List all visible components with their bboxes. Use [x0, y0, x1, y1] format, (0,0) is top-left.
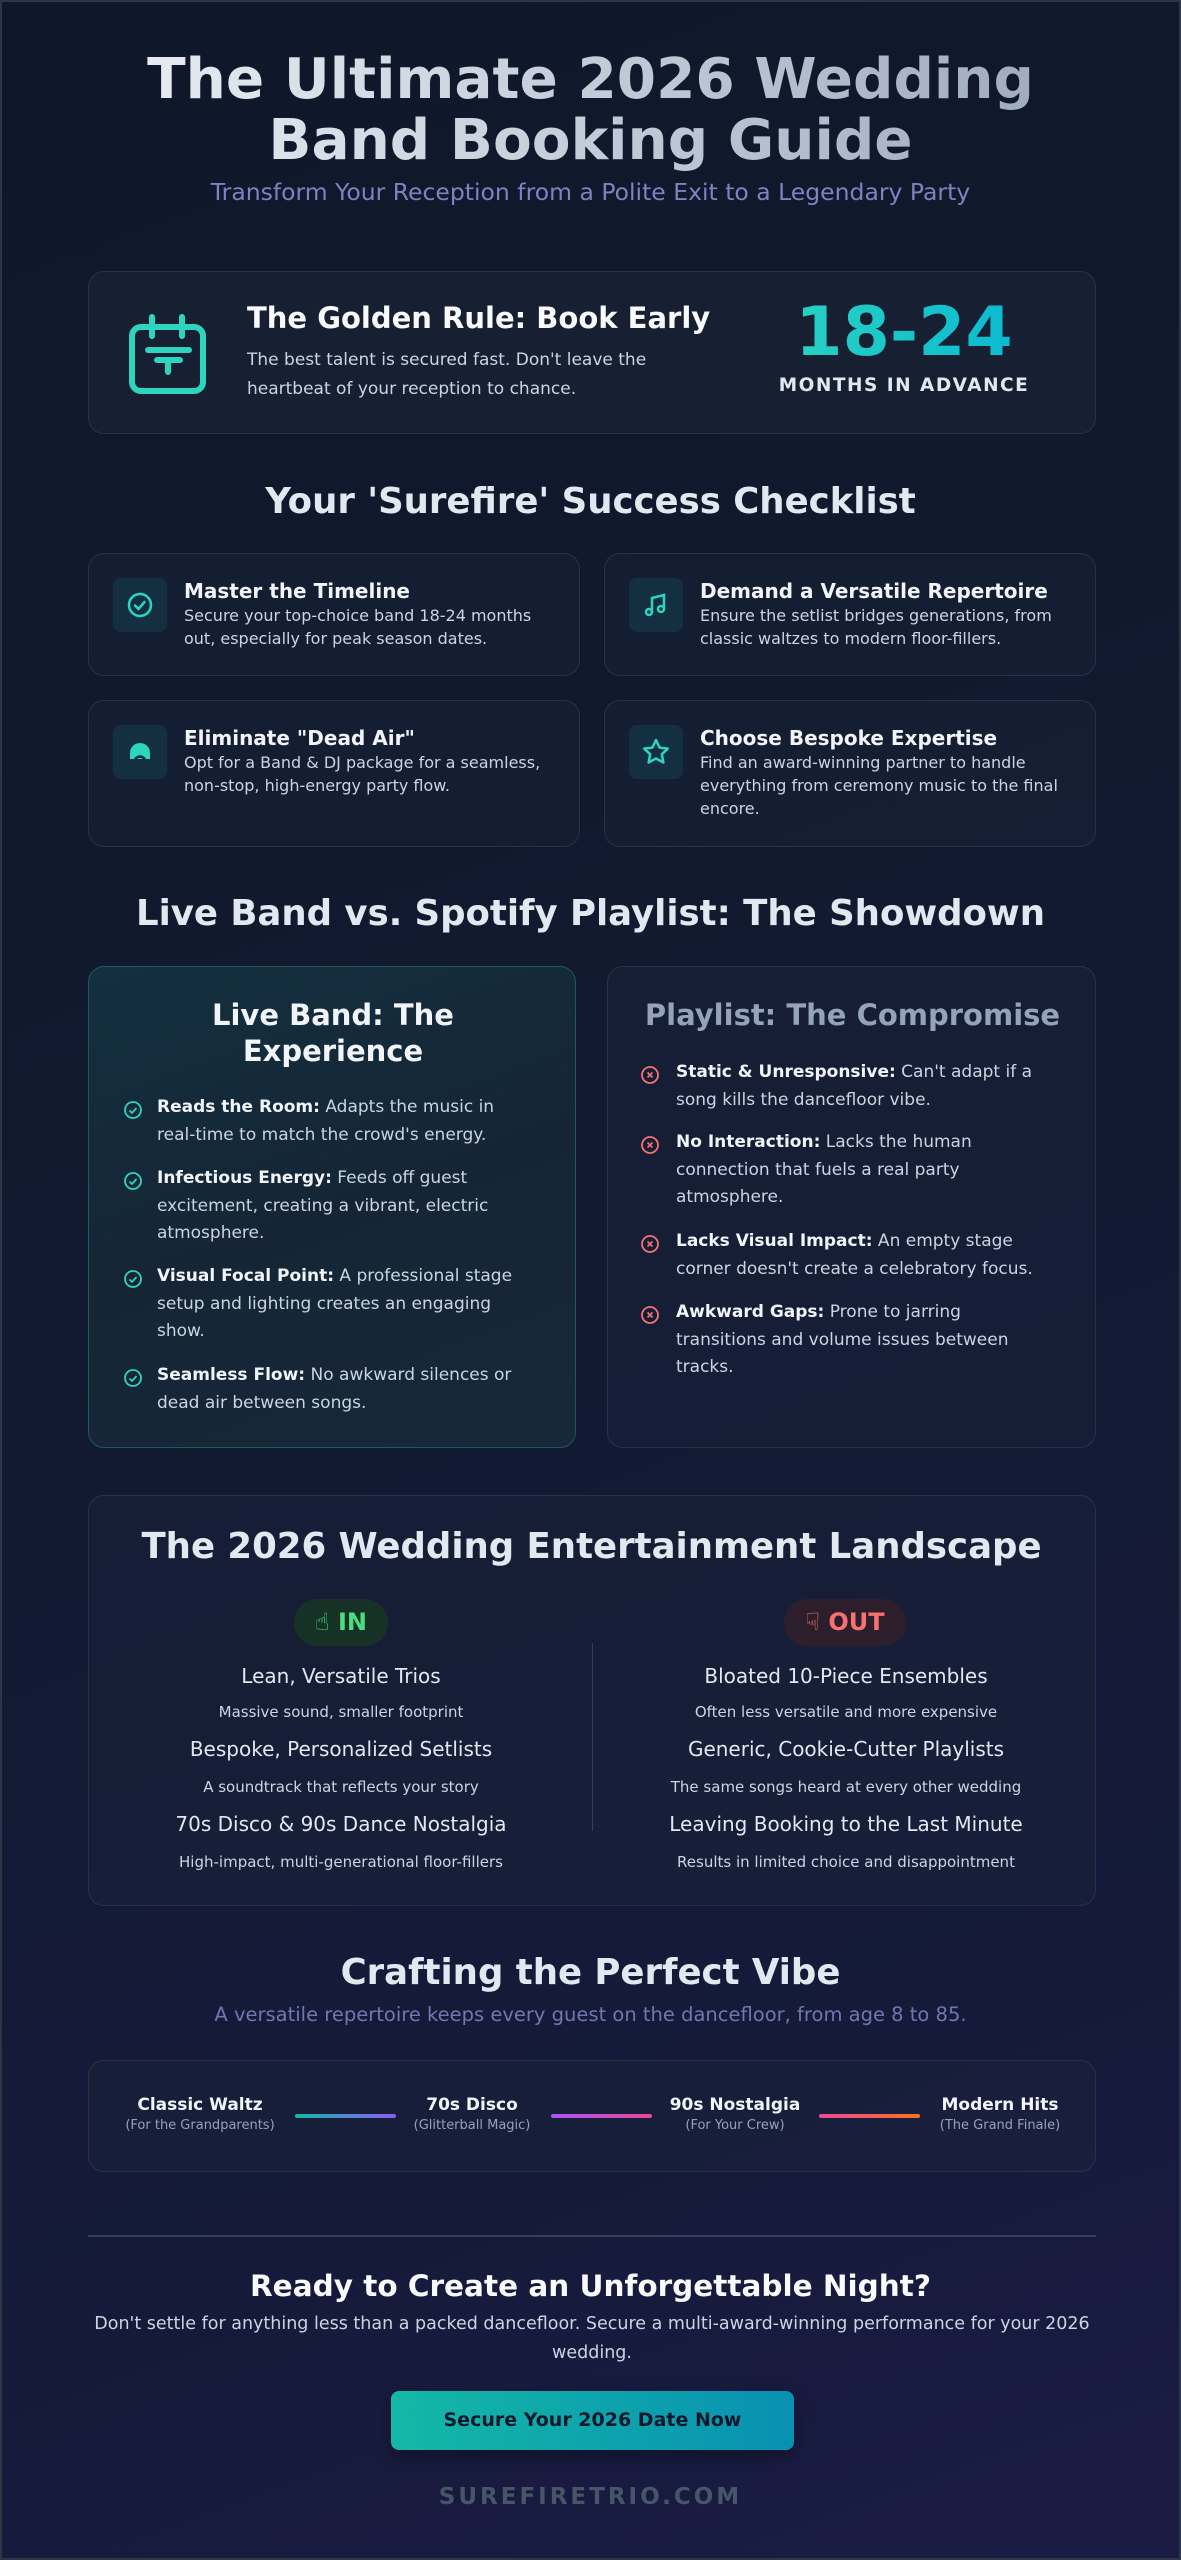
CTA button	[391, 2391, 794, 2450]
CTA heading: Ready to Create an Unforgettable Night?	[250, 2269, 931, 2303]
icon: music note	[629, 578, 683, 632]
panel: checklist timeline: Secure your top-choice band 18-24 months out, especially for peak season dates.	[184, 606, 531, 648]
timeline items: (For Your Crew)	[685, 2118, 785, 2133]
panel: checklist timeline: Master the Timeline	[184, 579, 410, 603]
out list: The same songs heard at every other wedding	[671, 1778, 1021, 1796]
icon: headphones	[113, 725, 167, 779]
live band heading: Live Band: The	[212, 998, 454, 1032]
live band heading: Experience	[243, 1034, 423, 1068]
stat: 18-24 months: 18-24	[795, 293, 1013, 372]
panel: landscape	[88, 1495, 1096, 1906]
panel: checklist expertise	[604, 700, 1096, 847]
pill: OUT: ☟ OUT	[805, 1608, 885, 1636]
heading: checklist: Your 'Surefire' Success Checklist	[265, 481, 916, 522]
playlist list: No Interaction: Lacks the human connection that fuels a real party atmosphere.	[676, 1132, 972, 1207]
icon: check circle	[113, 578, 167, 632]
in list: High-impact, multi-generational floor-fillers	[179, 1853, 503, 1871]
out list: Results in limited choice and disappointment	[677, 1853, 1015, 1871]
timeline items: (For the Grandparents)	[125, 2118, 275, 2133]
in list: Massive sound, smaller footprint	[219, 1703, 463, 1721]
playlist heading: Playlist: The Compromise	[645, 998, 1060, 1032]
stat: 18-24 months	[779, 293, 1029, 396]
icon: calendar	[129, 314, 206, 394]
live band list: Reads the Room: Adapts the music in real-time to match the crowd's energy.	[157, 1097, 494, 1144]
landscape heading: The 2026 Wedding Entertainment Landscape	[141, 1526, 1042, 1567]
footer: website: SUREFIRETRIO.COM	[439, 2484, 742, 2510]
playlist list: Lacks Visual Impact: An empty stage corner doesn't create a celebratory focus.	[676, 1231, 1033, 1278]
out list: Leaving Booking to the Last Minute	[669, 1812, 1023, 1836]
timeline items: 70s Disco	[426, 2095, 518, 2115]
panel: checklist expertise: Choose Bespoke Expertise	[700, 726, 997, 750]
playlist list	[641, 1062, 1033, 1377]
pill: OUT	[784, 1599, 906, 1646]
title: Band Booking Guide	[268, 108, 913, 173]
in list: Bespoke, Personalized Setlists	[190, 1737, 492, 1761]
live band heading	[212, 998, 454, 1068]
out list: Often less versatile and more expensive	[695, 1703, 997, 1721]
panel: live band	[88, 966, 576, 1448]
panel: checklist dead air	[88, 700, 580, 847]
timeline items: (Glitterball Magic)	[414, 2118, 530, 2133]
timeline items	[125, 2095, 1060, 2133]
in list: Lean, Versatile Trios	[241, 1664, 441, 1688]
golden rule text: The best talent is secured fast. Don't leave the heartbeat of your reception to chance.	[247, 350, 646, 399]
playlist list: Static & Unresponsive: Can't adapt if a song kills the dancefloor vibe.	[676, 1062, 1032, 1110]
live band list: Seamless Flow: No awkward silences or dead air between songs.	[157, 1365, 511, 1412]
heading: crafting the vibe: Crafting the Perfect Vibe	[341, 1952, 840, 1993]
panel: checklist repertoire: Demand a Versatile Repertoire	[700, 579, 1048, 603]
pill: IN: ☝ IN	[315, 1608, 367, 1636]
timeline items: 90s Nostalgia	[670, 2095, 800, 2115]
timeline items: Modern Hits	[942, 2095, 1058, 2115]
in list	[175, 1664, 507, 1871]
playlist list: Awkward Gaps: Prone to jarring transitions and volume issues between tracks.	[676, 1302, 1008, 1377]
panel: golden rule	[88, 271, 1096, 434]
out list	[669, 1664, 1023, 1871]
heading: showdown: Live Band vs. Spotify Playlist: The Showdown	[136, 893, 1045, 934]
panel: checklist timeline	[88, 553, 580, 676]
timeline items: Classic Waltz	[137, 2095, 263, 2115]
crafting subtitle: A versatile repertoire keeps every guest on the dancefloor, from age 8 to 85.	[214, 2003, 967, 2026]
timeline items: (The Grand Finale)	[940, 2118, 1060, 2133]
panel: checklist repertoire: Ensure the setlist bridges generations, from classic waltzes to modern floor-fillers.	[700, 606, 1052, 648]
CTA text: Don't settle for anything less than a packed dancefloor. Secure a multi-award-winning performance for your 2026 wedding.	[94, 2314, 1090, 2363]
live band list	[124, 1097, 512, 1412]
in list: A soundtrack that reflects your story	[203, 1778, 479, 1796]
CTA button: Secure Your 2026 Date Now	[444, 2409, 742, 2431]
panel: checklist dead air: Opt for a Band & DJ package for a seamless, non-stop, high-energy party flow.	[184, 753, 540, 795]
out list: Bloated 10-Piece Ensembles	[704, 1664, 988, 1688]
panel: checklist repertoire	[604, 553, 1096, 676]
title	[2, 49, 1179, 171]
stat: 18-24 months: MONTHS IN ADVANCE	[779, 375, 1029, 396]
panel: playlist	[607, 966, 1096, 1448]
live band list: Visual Focal Point: A professional stage setup and lighting creates an engaging show.	[157, 1266, 512, 1341]
in list: 70s Disco & 90s Dance Nostalgia	[175, 1812, 507, 1836]
panel: checklist expertise: Find an award-winning partner to handle everything from ceremony music to the final encore.	[700, 753, 1058, 818]
panel: music timeline	[88, 2060, 1096, 2172]
subtitle: Transform Your Reception from a Polite Exit to a Legendary Party	[211, 178, 970, 206]
icon: star	[629, 725, 683, 779]
pill: IN	[294, 1599, 388, 1646]
live band list: Infectious Energy: Feeds off guest excitement, creating a vibrant, electric atmosphere.	[157, 1168, 488, 1243]
golden rule heading: The Golden Rule: Book Early	[247, 301, 710, 335]
panel: checklist dead air: Eliminate "Dead Air"	[184, 726, 415, 750]
title: The Ultimate 2026 Wedding	[147, 47, 1034, 112]
out list: Generic, Cookie-Cutter Playlists	[688, 1737, 1004, 1761]
